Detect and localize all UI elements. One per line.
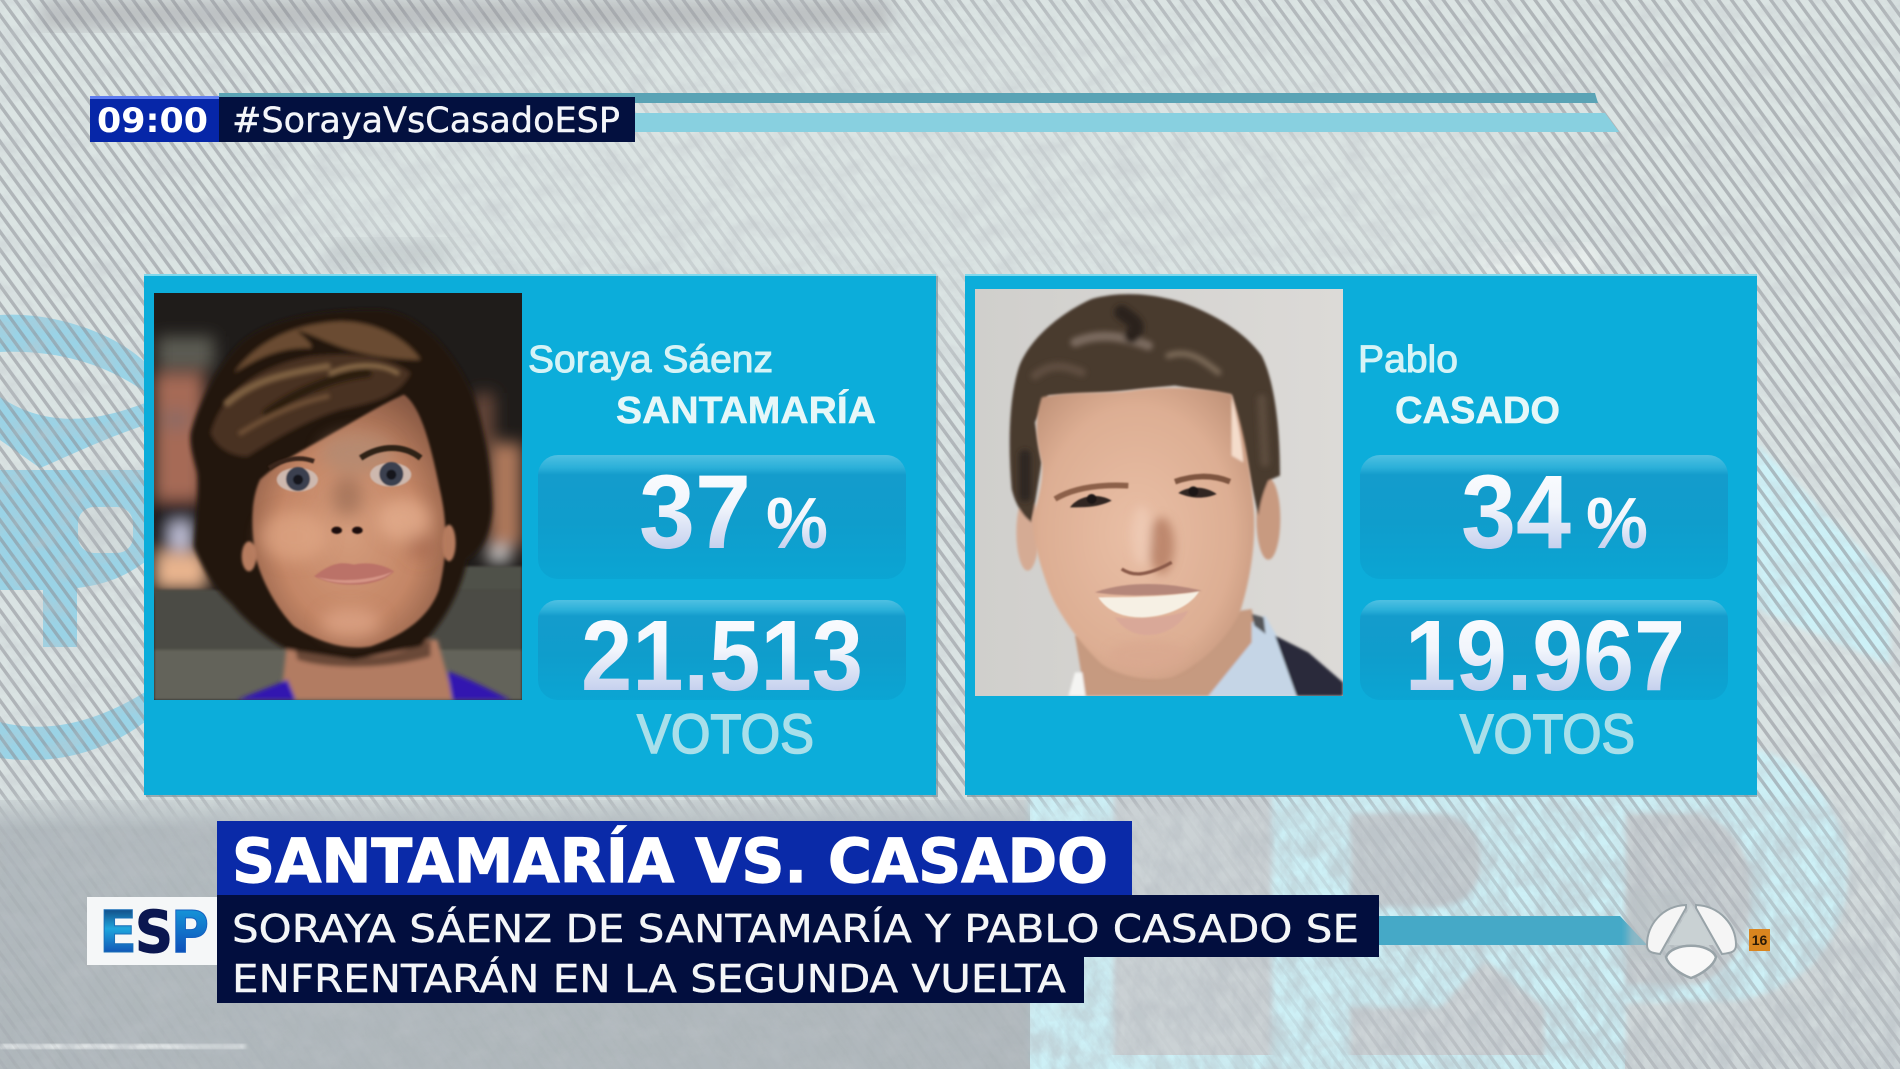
time badge: 09:00 (97, 101, 208, 141)
panel: Casado (965, 274, 1757, 797)
stat: percentage: 37 (639, 454, 751, 571)
name (1358, 339, 1560, 432)
hair (1010, 294, 1280, 522)
stat: percentage: 34 (1461, 454, 1571, 571)
bottom teal bar (1379, 916, 1647, 945)
background: logo hole (78, 507, 133, 553)
name (528, 339, 876, 432)
headline: SANTAMARÍA VS. CASADO (232, 825, 1108, 897)
ESP logo: P (171, 898, 209, 966)
stat: percentage: % (766, 484, 828, 564)
stat: votes (1360, 600, 1728, 765)
name: Soraya Sáenz (528, 339, 773, 381)
ESP logo (87, 897, 217, 966)
icon: Antena 3 logo (1628, 890, 1736, 978)
photo: Soraya Sáenz de Santamaría (154, 293, 522, 700)
face (252, 395, 445, 648)
icon: age rating badge: 16 (1752, 932, 1767, 948)
background: left party logo (0, 315, 145, 760)
stat: votes: VOTOS (1460, 702, 1635, 765)
photo: Pablo Casado (975, 289, 1343, 696)
stat: votes: 19.967 (1405, 600, 1685, 712)
stat: votes: 21.513 (581, 600, 863, 712)
icon: age rating badge (1749, 929, 1770, 951)
subheadline (217, 895, 1379, 1003)
background: giant cyan PP letters (1028, 443, 1890, 1062)
hair highlights (234, 321, 421, 373)
stat: percentage (538, 454, 906, 579)
stat: percentage (1360, 454, 1728, 579)
stat: votes: VOTOS (637, 702, 814, 765)
ESP logo: E (99, 898, 137, 966)
name: Pablo (1358, 339, 1458, 381)
facial features (269, 448, 421, 585)
name: CASADO (1395, 390, 1560, 432)
face (1032, 388, 1254, 679)
facial features (1055, 477, 1230, 635)
subheadline: SORAYA SÁENZ DE SANTAMARÍA Y PABLO CASADO SE (232, 907, 1359, 951)
ears (1016, 494, 1039, 571)
neck (281, 640, 454, 700)
neck and clothing (1075, 609, 1262, 696)
panel: Santamaría (144, 274, 938, 797)
name: SANTAMARÍA (616, 388, 876, 432)
stat: votes (538, 600, 906, 765)
hashtag: #SorayaVsCasadoESP (232, 101, 620, 141)
ESP logo: S (135, 898, 173, 966)
hair mass (190, 310, 492, 660)
stat: percentage: % (1586, 484, 1648, 564)
subheadline: ENFRENTARÁN EN LA SEGUNDA VUELTA (232, 957, 1066, 1001)
top ticker lines (219, 93, 1619, 132)
